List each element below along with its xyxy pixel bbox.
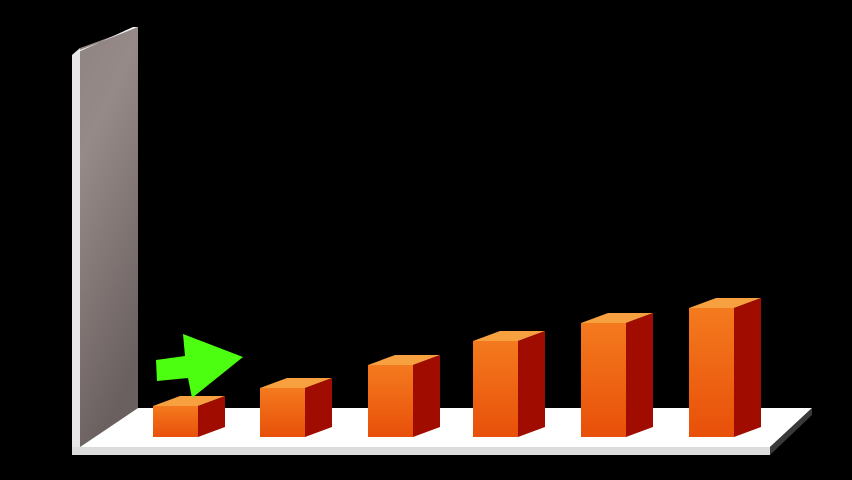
bar 1 (153, 396, 225, 437)
bar 6 (689, 298, 761, 437)
bar 5 (581, 313, 653, 437)
bar 4 (473, 331, 545, 437)
floor (72, 408, 812, 455)
arrow: green pointer (156, 334, 243, 398)
bar 3 (368, 355, 440, 437)
bar 2 (260, 378, 332, 437)
back wall (72, 27, 138, 455)
